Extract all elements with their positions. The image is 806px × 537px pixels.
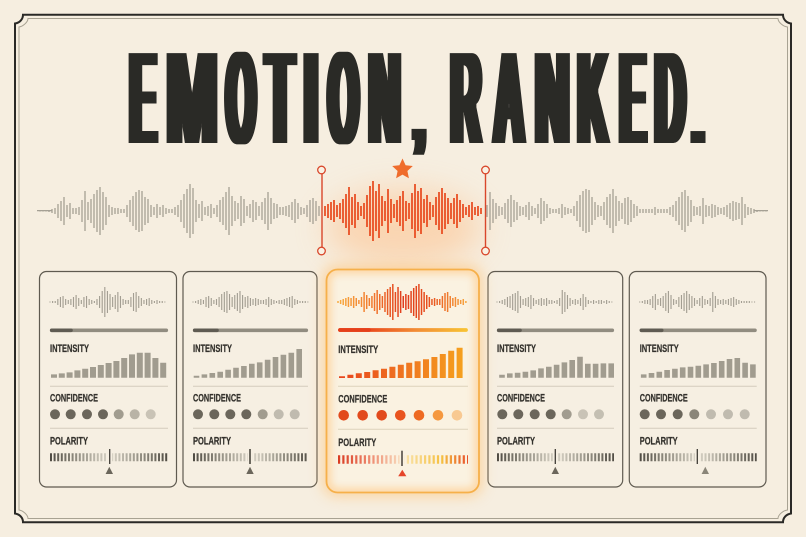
polarity scale xyxy=(338,451,468,476)
title: K xyxy=(578,22,608,174)
confidence dots xyxy=(338,410,462,421)
card glow: highlighted card xyxy=(323,266,482,496)
waveform: left grey section xyxy=(37,184,319,238)
label: confidence: CONFIDENCE xyxy=(193,393,241,405)
progress bar xyxy=(499,328,612,332)
bar chart: intensity xyxy=(196,349,299,378)
label: intensity: INTENSITY xyxy=(338,344,379,356)
bar chart: intensity xyxy=(54,353,163,378)
bar chart: intensity xyxy=(342,348,460,378)
polarity scale xyxy=(640,449,757,474)
title: O xyxy=(226,22,255,174)
mini waveform xyxy=(338,284,466,320)
polarity scale xyxy=(497,449,614,474)
title: N xyxy=(536,22,569,174)
label: polarity: POLARITY xyxy=(50,435,88,447)
title: R xyxy=(451,22,481,174)
confidence dots xyxy=(193,409,300,419)
icon: star xyxy=(392,158,413,178)
label: polarity: POLARITY xyxy=(338,437,377,449)
panel: card 5 xyxy=(629,272,766,487)
title: E xyxy=(620,22,646,174)
title: . xyxy=(691,54,705,166)
panel: card 1 xyxy=(40,272,176,487)
label: intensity: INTENSITY xyxy=(640,343,679,355)
bar chart: intensity xyxy=(644,358,753,378)
mini waveform xyxy=(640,291,755,313)
title: , xyxy=(412,56,426,162)
mini waveform xyxy=(50,287,165,317)
title: D xyxy=(655,22,685,174)
label: confidence: CONFIDENCE xyxy=(640,393,688,405)
label: intensity: INTENSITY xyxy=(193,343,232,355)
selection bracket: right handle xyxy=(482,166,489,255)
title: O xyxy=(328,22,358,174)
title: M xyxy=(166,22,218,174)
progress bar xyxy=(195,328,306,332)
label: confidence: CONFIDENCE xyxy=(50,393,98,405)
label: intensity: INTENSITY xyxy=(50,343,89,355)
panel: card 4 xyxy=(488,272,623,487)
title: I xyxy=(304,22,318,174)
mini waveform xyxy=(193,291,308,313)
title: A xyxy=(494,22,524,174)
bar chart: intensity xyxy=(502,357,611,378)
panel: card 3 highlighted xyxy=(326,270,479,492)
label: polarity: POLARITY xyxy=(497,435,535,447)
waveform: selected orange section xyxy=(325,181,481,241)
progress bar xyxy=(52,328,166,332)
title: E xyxy=(130,22,156,174)
confidence dots xyxy=(50,409,156,419)
progress bar xyxy=(641,328,755,332)
polarity scale xyxy=(193,449,308,474)
progress bar xyxy=(340,328,466,332)
polarity scale xyxy=(50,449,168,474)
title: N xyxy=(369,22,400,174)
selection bracket: left handle xyxy=(318,166,325,255)
confidence dots xyxy=(497,409,604,419)
waveform: full timeline xyxy=(37,181,768,241)
label: polarity: POLARITY xyxy=(193,435,231,447)
label: intensity: INTENSITY xyxy=(497,343,536,355)
highlight glow behind selected waveform xyxy=(325,190,481,266)
mini waveform xyxy=(497,290,612,314)
title: T xyxy=(266,22,294,174)
label: polarity: POLARITY xyxy=(640,435,678,447)
waveform: right grey section xyxy=(487,189,768,233)
label: confidence: CONFIDENCE xyxy=(497,393,545,405)
confidence dots xyxy=(640,409,750,419)
panel: card 2 xyxy=(183,272,317,487)
label: confidence: CONFIDENCE xyxy=(338,394,387,406)
